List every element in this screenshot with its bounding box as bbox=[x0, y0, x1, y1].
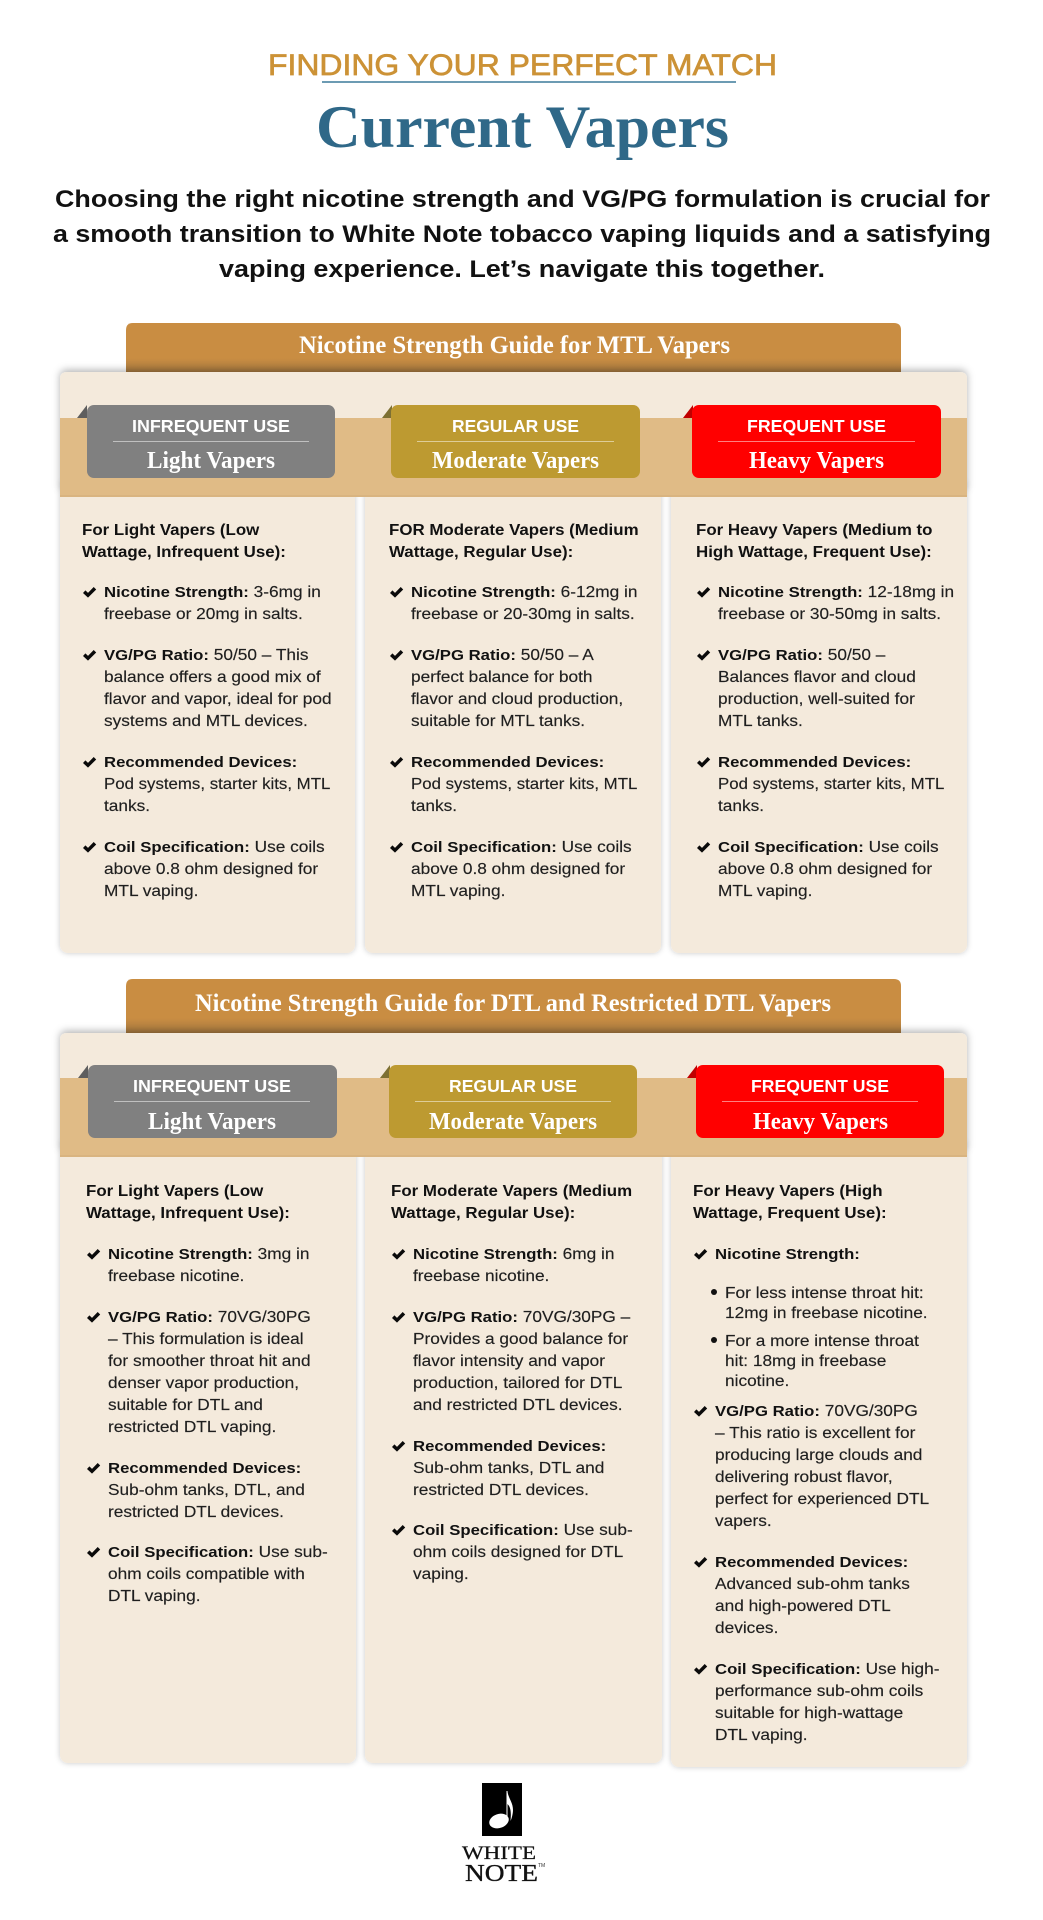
bullet: recommended devices: Recommended Devices: bbox=[715, 1555, 908, 1571]
logo: White Note: NOTE bbox=[465, 1861, 538, 1887]
badge: infrequent use bbox=[77, 405, 335, 478]
panel: nicotine strength guide for MTL vapers bbox=[60, 323, 967, 953]
bullet: recommended devices: tanks. bbox=[411, 798, 457, 815]
column: DTL moderate vapers bbox=[391, 1183, 633, 1583]
section tab: DTL: Nicotine Strength Guide for DTL and Restricted DTL Vapers bbox=[195, 990, 831, 1017]
bullet: VG/PG ratio: restricted DTL vaping. bbox=[108, 1419, 276, 1436]
badge: frequent use: Heavy Vapers bbox=[753, 1109, 888, 1135]
icon: music note bbox=[482, 1783, 522, 1836]
bullet: VG/PG ratio: – This formulation is ideal bbox=[108, 1331, 304, 1348]
section tab: DTL bbox=[126, 979, 901, 1033]
bullet: coil specification: performance sub-ohm coils bbox=[715, 1683, 923, 1700]
sub-bullet: less intense throat hit: For less intense throat hit: bbox=[725, 1285, 924, 1302]
bullet: recommended devices bbox=[392, 1439, 606, 1499]
bullet: VG/PG ratio: balance offers a good mix of bbox=[104, 669, 321, 686]
bullet: VG/PG ratio: denser vapor production, bbox=[108, 1375, 299, 1392]
sub-bullet: more intense throat hit bbox=[711, 1333, 919, 1390]
header band bbox=[60, 372, 967, 497]
badge: regular use: REGULAR USE bbox=[452, 416, 579, 436]
bullet: VG/PG ratio: – This ratio is excellent for bbox=[715, 1425, 916, 1442]
badge: frequent use bbox=[687, 1065, 944, 1138]
bullet: VG/PG ratio bbox=[83, 647, 332, 730]
bullet: VG/PG ratio: producing large clouds and bbox=[715, 1447, 922, 1464]
bullet: VG/PG ratio: VG/PG Ratio: 70VG/30PG – bbox=[413, 1309, 630, 1326]
bullet: recommended devices bbox=[390, 755, 637, 815]
intro paragraph bbox=[53, 186, 991, 283]
bullet: coil specification bbox=[694, 1661, 940, 1744]
logo: White Note bbox=[462, 1783, 545, 1887]
bullet: VG/PG ratio: VG/PG Ratio: 50/50 – bbox=[718, 647, 885, 664]
column heading: For Heavy Vapers (Medium to bbox=[696, 522, 933, 539]
bullet: recommended devices: Recommended Devices: bbox=[413, 1439, 606, 1455]
bullet: coil specification: ohm coils designed for DTL bbox=[413, 1544, 623, 1561]
bullet: VG/PG ratio bbox=[694, 1403, 929, 1530]
panel: nicotine strength guide for DTL and restricted DTL vapers bbox=[60, 979, 967, 1767]
intro paragraph: vaping experience. Let’s navigate this together. bbox=[219, 256, 825, 283]
bullet: VG/PG ratio: VG/PG Ratio: 50/50 – This bbox=[104, 647, 308, 664]
sub-bullet: more intense throat hit: nicotine. bbox=[725, 1373, 789, 1390]
bullet: coil specification: above 0.8 ohm designed for bbox=[718, 861, 933, 878]
bullet: nicotine strength: Nicotine Strength: 3mg in bbox=[108, 1246, 310, 1263]
column heading: Wattage, Infrequent Use): bbox=[86, 1205, 290, 1222]
bullet: VG/PG ratio: for smoother throat hit and bbox=[108, 1353, 311, 1370]
sub-bullet: less intense throat hit bbox=[711, 1285, 928, 1322]
bullet: recommended devices: Sub-ohm tanks, DTL and bbox=[413, 1460, 604, 1477]
bullet: VG/PG ratio: Provides a good balance for bbox=[413, 1331, 629, 1348]
bullet: VG/PG ratio: VG/PG Ratio: 50/50 – A bbox=[411, 647, 594, 664]
column cards bbox=[60, 480, 967, 953]
badge: regular use: Moderate Vapers bbox=[429, 1109, 597, 1135]
column heading: For Heavy Vapers (High bbox=[693, 1183, 883, 1200]
bullet: recommended devices: Pod systems, starter kits, MTL bbox=[411, 776, 637, 793]
bullet: recommended devices: and high-powered DTL bbox=[715, 1598, 891, 1615]
badge: regular use bbox=[380, 1065, 637, 1138]
bullet: recommended devices: Sub-ohm tanks, DTL, and bbox=[108, 1482, 305, 1499]
section tab: MTL bbox=[126, 323, 901, 372]
title: Current Vapers bbox=[316, 94, 729, 160]
bullet: VG/PG ratio bbox=[390, 647, 623, 730]
kicker: FINDING YOUR PERFECT MATCH bbox=[268, 49, 777, 82]
bullet: recommended devices: devices. bbox=[715, 1620, 778, 1637]
bullet: nicotine strength bbox=[83, 584, 321, 623]
logo: White Note: WHITE bbox=[462, 1843, 536, 1864]
bullet: coil specification: Coil Specification: Use high- bbox=[715, 1661, 940, 1678]
bullet: coil specification: Coil Specification: Use coils bbox=[104, 839, 325, 856]
bullet: VG/PG ratio: suitable for MTL tanks. bbox=[411, 713, 585, 730]
column: MTL light vapers bbox=[82, 522, 332, 900]
bullet: nicotine strength: freebase nicotine. bbox=[108, 1268, 244, 1285]
bullet: recommended devices bbox=[87, 1461, 305, 1521]
column heading: High Wattage, Frequent Use): bbox=[696, 544, 932, 561]
bullet: coil specification: MTL vaping. bbox=[718, 883, 812, 900]
column cards bbox=[60, 1140, 967, 1767]
bullet: nicotine strength: freebase nicotine. bbox=[413, 1268, 549, 1285]
bullet: recommended devices bbox=[83, 755, 330, 815]
column heading: For Light Vapers (Low bbox=[82, 522, 260, 539]
bullet: coil specification: ohm coils compatible with bbox=[108, 1566, 305, 1583]
badge: infrequent use: Light Vapers bbox=[148, 1109, 276, 1135]
bullet: VG/PG ratio: perfect for experienced DTL bbox=[715, 1491, 929, 1508]
bullet: coil specification: above 0.8 ohm designed for bbox=[411, 861, 626, 878]
bullet: recommended devices: Recommended Devices: bbox=[104, 755, 297, 771]
column: DTL light vapers bbox=[86, 1183, 328, 1605]
bullet: coil specification: suitable for high-wattage bbox=[715, 1705, 903, 1722]
bullet: coil specification: Coil Specification: Use coils bbox=[411, 839, 632, 856]
bullet: VG/PG ratio: production, tailored for DTL bbox=[413, 1375, 622, 1392]
bullet: VG/PG ratio bbox=[87, 1309, 311, 1436]
bullet: nicotine strength bbox=[390, 584, 637, 623]
bullet: VG/PG ratio: Balances flavor and cloud bbox=[718, 669, 916, 686]
bullet: nicotine strength: Nicotine Strength: 3-6mg in bbox=[104, 584, 321, 601]
bullet: coil specification: DTL vaping. bbox=[715, 1727, 807, 1744]
column heading: Wattage, Frequent Use): bbox=[693, 1205, 887, 1222]
header: kicker, rule and title bbox=[268, 49, 777, 160]
bullet: coil specification: Coil Specification: Use coils bbox=[718, 839, 939, 856]
column: DTL heavy vapers bbox=[693, 1183, 940, 1744]
bullet: VG/PG ratio: delivering robust flavor, bbox=[715, 1469, 893, 1486]
bullet: coil specification: MTL vaping. bbox=[104, 883, 198, 900]
bullet: coil specification bbox=[697, 839, 939, 900]
badge: frequent use bbox=[683, 405, 941, 478]
bullet: VG/PG ratio: VG/PG Ratio: 70VG/30PG bbox=[715, 1403, 918, 1420]
bullet: recommended devices bbox=[694, 1555, 910, 1637]
bullet: recommended devices: Pod systems, starter kits, MTL bbox=[104, 776, 330, 793]
bullet: coil specification: Coil Specification: Use sub- bbox=[413, 1522, 633, 1539]
column: MTL heavy vapers bbox=[696, 522, 954, 900]
column heading: For Moderate Vapers (Medium bbox=[391, 1183, 632, 1200]
bullet: recommended devices: tanks. bbox=[718, 798, 764, 815]
bullet: recommended devices: Recommended Devices: bbox=[718, 755, 911, 771]
badge: regular use: REGULAR USE bbox=[449, 1076, 577, 1096]
badge: infrequent use: INFREQUENT USE bbox=[132, 416, 290, 436]
bullet: nicotine strength: Nicotine Strength: bbox=[715, 1247, 860, 1263]
badge: infrequent use: Light Vapers bbox=[147, 448, 275, 474]
bullet: VG/PG ratio bbox=[392, 1309, 631, 1414]
column: MTL moderate vapers bbox=[389, 522, 639, 900]
sub-bullet: more intense throat hit: hit: 18mg in freebase bbox=[725, 1353, 886, 1370]
badge: infrequent use bbox=[78, 1065, 337, 1138]
bullet: VG/PG ratio: vapers. bbox=[715, 1513, 772, 1530]
column heading: Wattage, Regular Use): bbox=[389, 544, 573, 561]
bullet: recommended devices: Recommended Devices: bbox=[411, 755, 604, 771]
logo: White Note: TM bbox=[538, 1863, 545, 1869]
bullet: nicotine strength: Nicotine Strength: 6-12mg in bbox=[411, 584, 637, 601]
bullet: VG/PG ratio: MTL tanks. bbox=[718, 713, 803, 730]
badge: regular use: Moderate Vapers bbox=[432, 448, 599, 474]
intro paragraph: Choosing the right nicotine strength and VG/PG formulation is crucial for bbox=[55, 186, 991, 213]
bullet: nicotine strength: freebase or 20-30mg in salts. bbox=[411, 606, 635, 623]
bullet: recommended devices: Pod systems, starter kits, MTL bbox=[718, 776, 944, 793]
bullet: nicotine strength: Nicotine Strength: 12-18mg in bbox=[718, 584, 954, 601]
section tab: MTL: Nicotine Strength Guide for MTL Vapers bbox=[299, 332, 730, 359]
bullet: coil specification bbox=[390, 839, 632, 900]
bullet: nicotine strength: freebase or 20mg in salts. bbox=[104, 606, 303, 623]
bullet: recommended devices: restricted DTL devices. bbox=[108, 1504, 284, 1521]
bullet: nicotine strength bbox=[87, 1246, 310, 1285]
bullet: VG/PG ratio: flavor intensity and vapor bbox=[413, 1353, 606, 1370]
badge: frequent use: FREQUENT USE bbox=[747, 416, 886, 436]
bullet: nicotine strength: freebase or 30-50mg in salts. bbox=[718, 606, 941, 623]
column heading: FOR Moderate Vapers (Medium bbox=[389, 522, 639, 539]
bullet: recommended devices bbox=[697, 755, 944, 815]
bullet: VG/PG ratio bbox=[697, 647, 916, 730]
header band bbox=[60, 1033, 967, 1157]
bullet: recommended devices: Advanced sub-ohm tanks bbox=[715, 1576, 910, 1593]
badge: frequent use: Heavy Vapers bbox=[749, 448, 884, 474]
bullet: VG/PG ratio: production, well-suited for bbox=[718, 691, 915, 708]
bullet: coil specification bbox=[83, 839, 325, 900]
bullet: recommended devices: Recommended Devices: bbox=[108, 1461, 301, 1477]
bullet: recommended devices: tanks. bbox=[104, 798, 150, 815]
column heading: Wattage, Infrequent Use): bbox=[82, 544, 286, 561]
badge: infrequent use: INFREQUENT USE bbox=[133, 1076, 291, 1096]
bullet: nicotine strength bbox=[392, 1246, 615, 1285]
bullet: coil specification: above 0.8 ohm designed for bbox=[104, 861, 319, 878]
bullet: VG/PG ratio: perfect balance for both bbox=[411, 669, 592, 686]
bullet: VG/PG ratio: suitable for DTL and bbox=[108, 1397, 263, 1414]
intro paragraph: a smooth transition to White Note tobacco vaping liquids and a satisfying bbox=[53, 221, 991, 248]
sub-bullet: less intense throat hit: 12mg in freebase nicotine. bbox=[725, 1305, 928, 1322]
bullet: coil specification: vaping. bbox=[413, 1566, 469, 1583]
bullet: VG/PG ratio: flavor and vapor, ideal for pod bbox=[104, 691, 332, 708]
badge: regular use bbox=[382, 405, 640, 478]
bullet: coil specification bbox=[87, 1544, 328, 1605]
bullet: coil specification: MTL vaping. bbox=[411, 883, 505, 900]
bullet: nicotine strength: Nicotine Strength: 6mg in bbox=[413, 1246, 615, 1263]
sub-bullet: more intense throat hit: For a more intense throat bbox=[725, 1333, 919, 1350]
badge: frequent use: FREQUENT USE bbox=[751, 1076, 889, 1096]
bullet: VG/PG ratio: systems and MTL devices. bbox=[104, 713, 308, 730]
bullet: coil specification: Coil Specification: Use sub- bbox=[108, 1544, 328, 1561]
bullet: VG/PG ratio: and restricted DTL devices. bbox=[413, 1397, 623, 1414]
column heading: Wattage, Regular Use): bbox=[391, 1205, 575, 1222]
column heading: For Light Vapers (Low bbox=[86, 1183, 264, 1200]
bullet: VG/PG ratio: VG/PG Ratio: 70VG/30PG bbox=[108, 1309, 311, 1326]
bullet: VG/PG ratio: flavor and cloud production, bbox=[411, 691, 623, 708]
bullet: nicotine strength bbox=[697, 584, 954, 623]
bullet: coil specification: DTL vaping. bbox=[108, 1588, 200, 1605]
bullet: recommended devices: restricted DTL devices. bbox=[413, 1482, 589, 1499]
bullet: coil specification bbox=[392, 1522, 633, 1583]
